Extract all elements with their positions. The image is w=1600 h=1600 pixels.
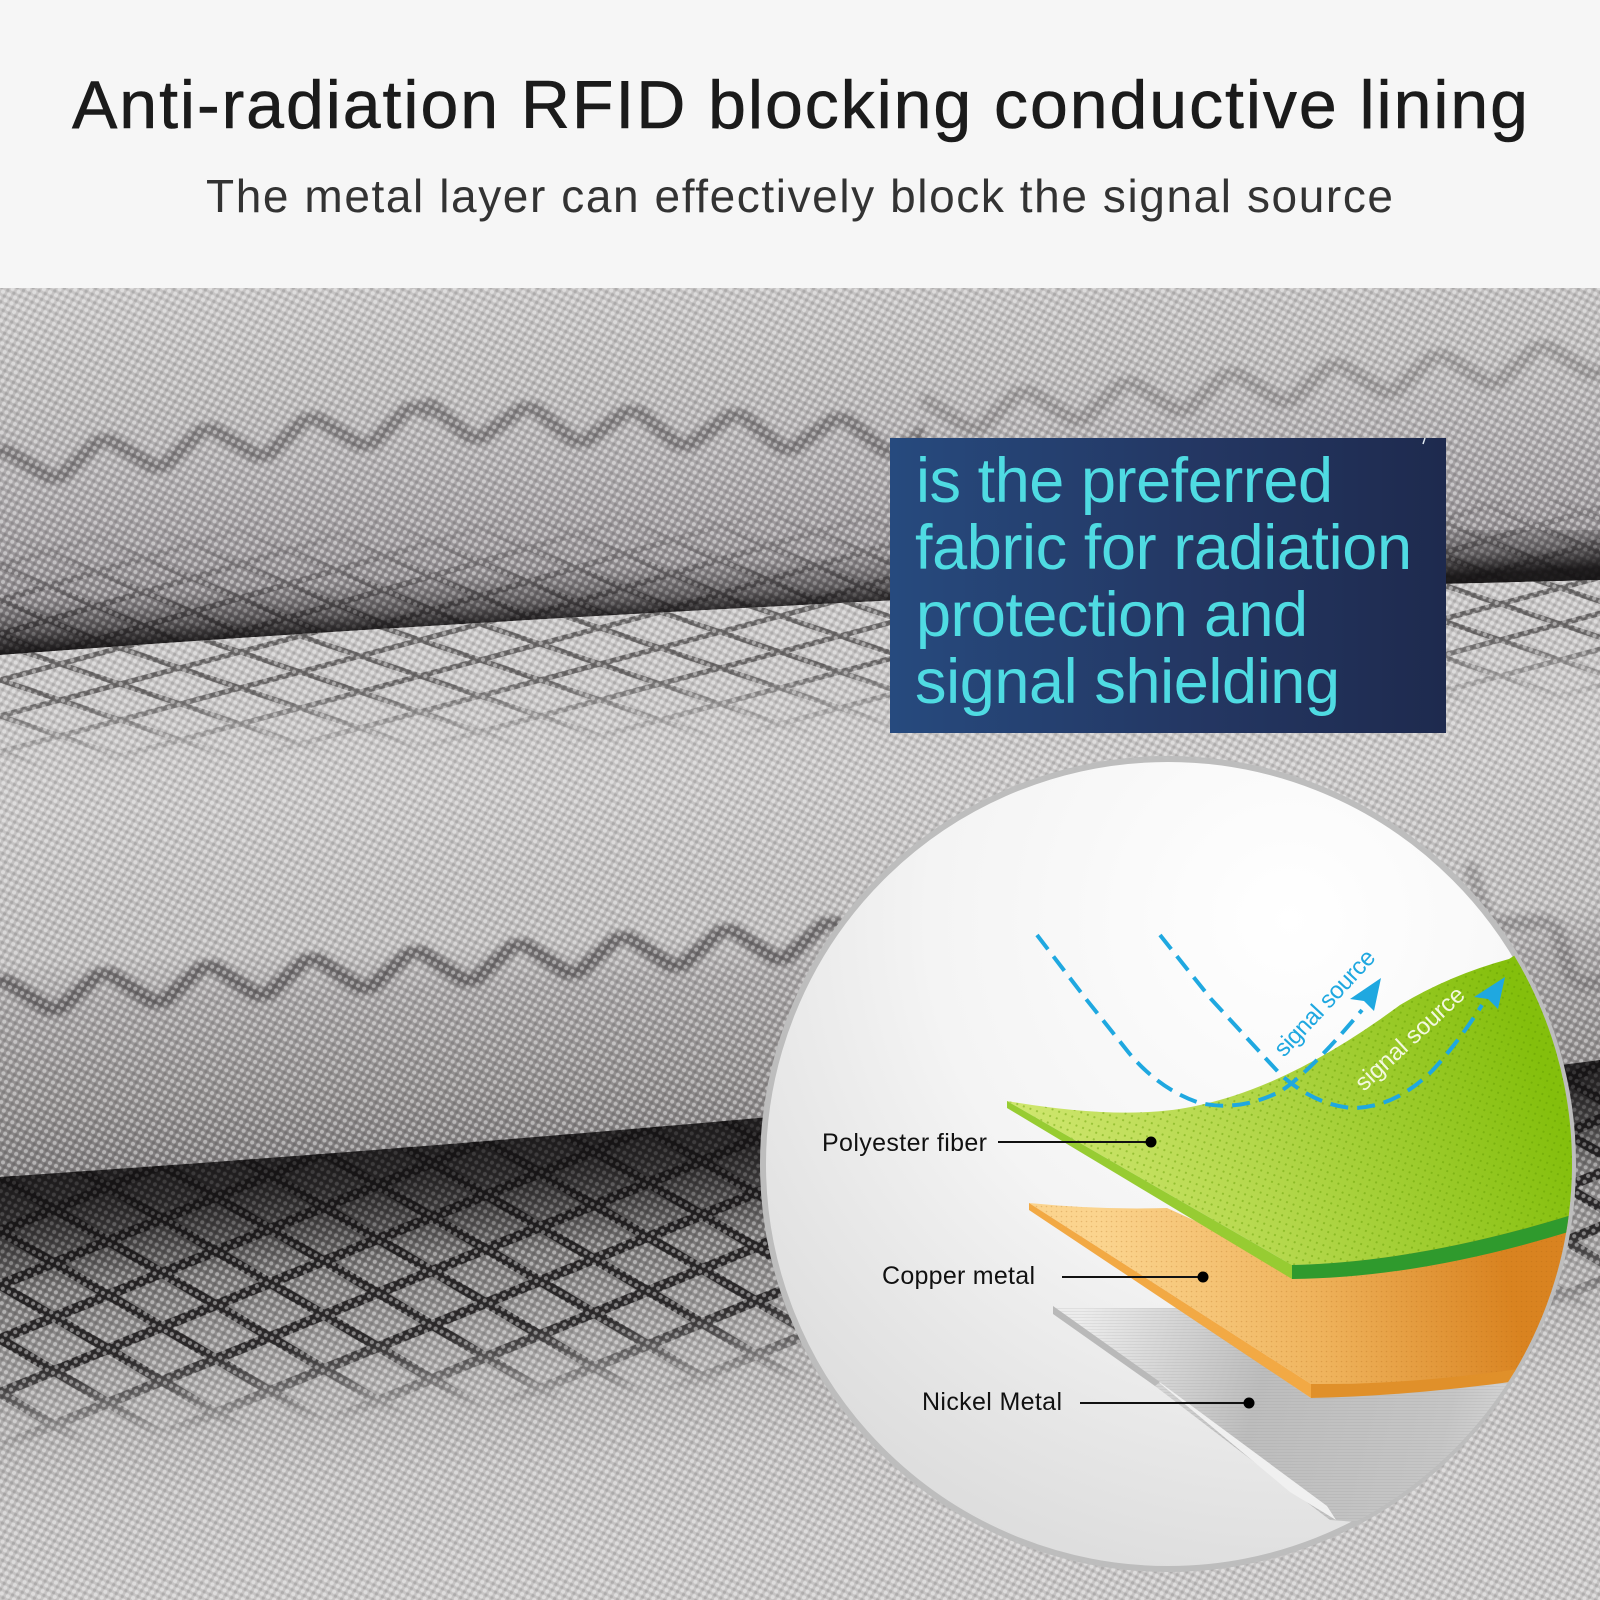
- panel: preferred fabric statement: protection and: [916, 580, 1308, 650]
- circular layer diagram: [763, 759, 1600, 1569]
- polyester fiber layer: [1007, 956, 1572, 1279]
- nickel metal layer: [1053, 1306, 1508, 1522]
- signal path dashed arrows: [1037, 935, 1505, 1108]
- callout: polyester fiber: Polyester fiber: [822, 1129, 987, 1157]
- callout: nickel metal: Nickel Metal: [922, 1388, 1062, 1416]
- callout: nickel metal: [922, 1388, 1254, 1416]
- header band: [0, 0, 1600, 289]
- label: signal source on air: signal source: [1269, 944, 1381, 1062]
- title: Anti-radiation RFID blocking conductive lining: [72, 67, 1528, 143]
- callout: polyester fiber: [822, 1129, 1156, 1157]
- copper metal layer: [1029, 1200, 1600, 1398]
- panel: preferred fabric statement: fabric for radiation: [915, 513, 1412, 583]
- panel: preferred fabric statement: [890, 438, 1446, 733]
- callout: copper metal: [882, 1262, 1208, 1290]
- upper fabric fold: [0, 288, 1600, 670]
- middle fabric fold: [0, 580, 1600, 1190]
- panel: preferred fabric statement: signal shielding: [915, 647, 1340, 717]
- lower fabric fold: [0, 1060, 1600, 1600]
- label: signal source on fabric: signal source: [1350, 981, 1470, 1096]
- callout: copper metal: Copper metal: [882, 1262, 1035, 1290]
- panel: preferred fabric statement: is the preferred: [916, 446, 1333, 516]
- subtitle: The metal layer can effectively block the signal source: [206, 170, 1393, 222]
